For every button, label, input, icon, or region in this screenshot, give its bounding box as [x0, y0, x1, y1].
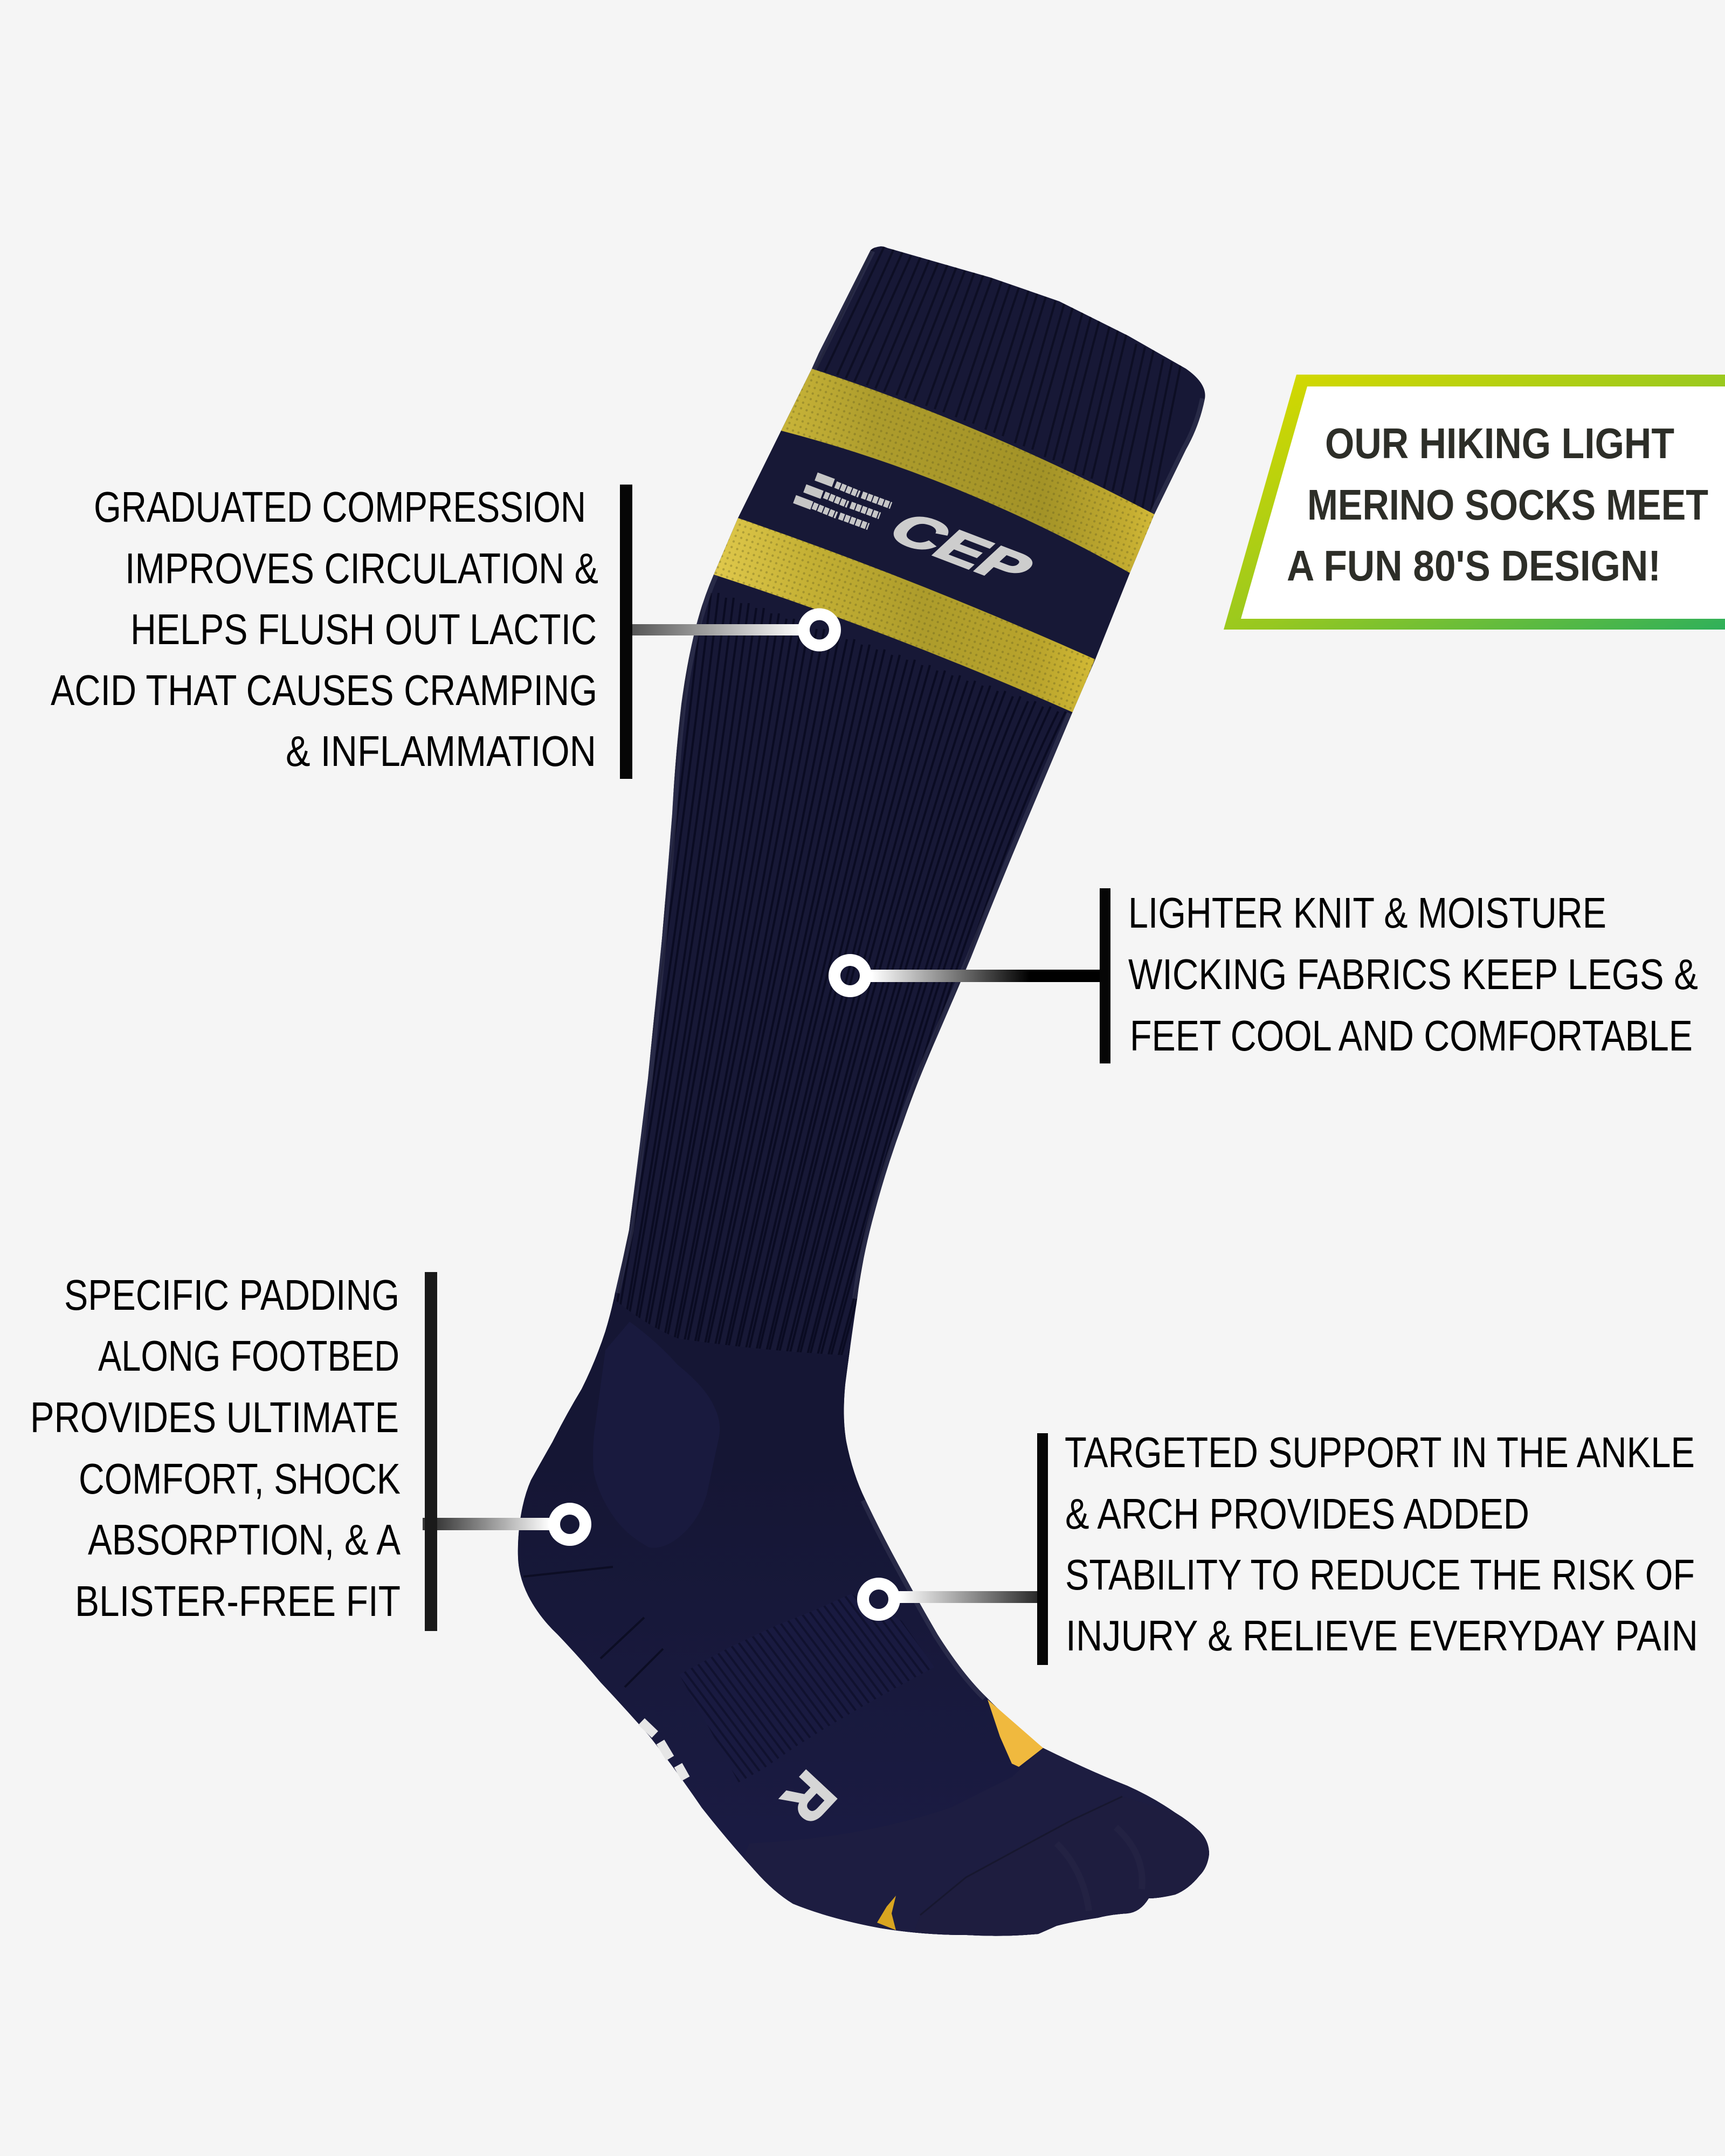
cep logo wordmark: CEP	[875, 505, 1047, 593]
sock edge sheen	[615, 250, 1205, 1697]
marker	[804, 614, 835, 646]
callout text: LIGHTER KNIT & MOISTURE	[1128, 889, 1606, 937]
cep logo mark	[795, 476, 891, 527]
leg ribbing, second course	[588, 588, 1058, 1369]
toe seam	[920, 1796, 1122, 1915]
cuff ribbing, third course	[837, 249, 1164, 505]
callout text: ALONG FOOTBED	[98, 1332, 399, 1380]
callout text: BLISTER-FREE FIT	[75, 1577, 401, 1625]
yellow toe patch	[877, 1896, 896, 1930]
cuff ribbing, second course	[816, 244, 1172, 509]
toe ridges	[1057, 1827, 1142, 1911]
callout text: GRADUATED COMPRESSION	[94, 483, 586, 531]
heel and sole seams	[523, 1567, 663, 1687]
callout text: HELPS FLUSH OUT LACTIC	[130, 605, 597, 653]
marker	[554, 1509, 585, 1540]
marker	[863, 1584, 894, 1615]
callout text: ABSORPTION, & A	[88, 1516, 401, 1564]
marker	[834, 960, 866, 991]
callout: specific padding	[30, 1271, 585, 1631]
headline text	[1287, 419, 1708, 590]
forefoot zone	[744, 1748, 1209, 1936]
divider bar	[1037, 1433, 1048, 1665]
callout text: ACID THAT CAUSES CRAMPING	[51, 666, 597, 714]
upper yellow band	[781, 369, 1155, 573]
white panel fill	[1241, 386, 1725, 619]
headline text: A FUN 80'S DESIGN!	[1287, 542, 1661, 590]
divider bar	[1100, 888, 1110, 1063]
connector line	[895, 1591, 1038, 1603]
callout text: & ARCH PROVIDES ADDED	[1065, 1490, 1529, 1538]
upper band knit texture	[781, 369, 1155, 573]
sock body silhouette	[518, 246, 1209, 1936]
heel padding	[593, 1322, 720, 1508]
foot base tone	[518, 1299, 1209, 1936]
callout text: PROVIDES ULTIMATE	[30, 1393, 399, 1441]
connector line	[868, 970, 1110, 982]
gradient frame	[1224, 375, 1725, 630]
connector line	[620, 624, 801, 635]
sock illustration	[518, 246, 1209, 1936]
leg ribbing	[596, 588, 1066, 1369]
callout text: & INFLAMMATION	[286, 727, 596, 775]
cuff ribbing	[825, 247, 1181, 512]
headline panel	[1224, 375, 1725, 630]
callout text: IMPROVES CIRCULATION &	[125, 544, 598, 592]
callout text: SPECIFIC PADDING	[64, 1271, 399, 1319]
toe cap	[915, 1813, 1209, 1936]
sole lettering	[641, 1722, 686, 1779]
callout: lighter knit	[834, 888, 1698, 1063]
callout: graduated compression	[51, 483, 835, 779]
divider bar	[620, 485, 632, 779]
headline text: OUR HIKING LIGHT	[1325, 419, 1674, 467]
right-foot R marker: R	[770, 1759, 848, 1836]
callout text	[1065, 1428, 1698, 1660]
lower band knit texture	[714, 518, 1095, 713]
callout text	[30, 1271, 401, 1625]
divider bar	[425, 1272, 437, 1631]
yellow side patch	[988, 1699, 1043, 1767]
callout text	[51, 483, 598, 775]
callout: targeted support	[863, 1428, 1698, 1665]
connector line	[423, 1518, 555, 1530]
callout text	[1128, 889, 1698, 1060]
lower yellow band	[714, 518, 1095, 713]
callout text: COMFORT, SHOCK	[79, 1455, 401, 1503]
ribbed arch panel	[679, 1594, 934, 1782]
